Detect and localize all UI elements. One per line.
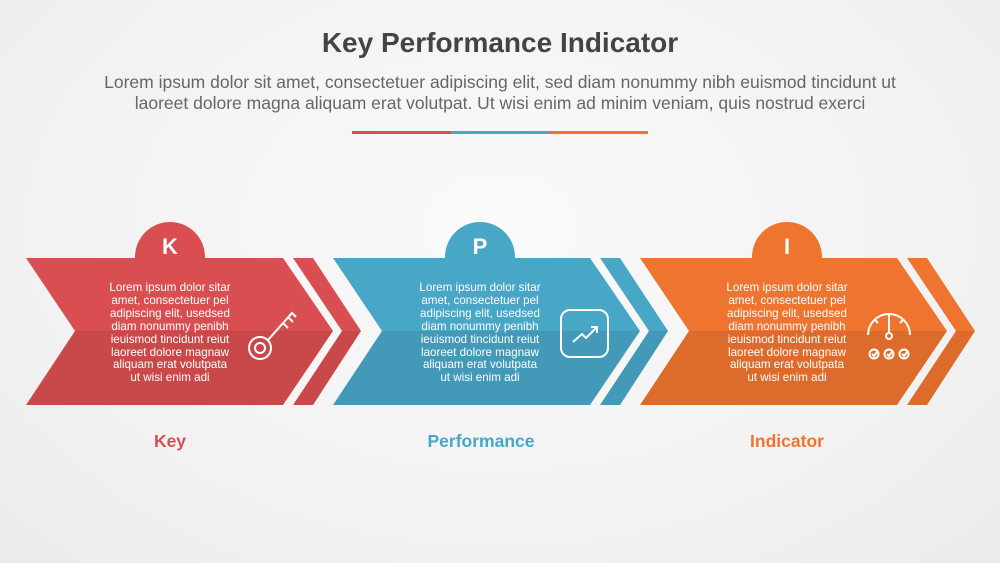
text: P body: laoreet dolore magnaw: [421, 346, 539, 359]
text: P body: ut wisi enim adi: [440, 371, 520, 384]
panel: K: K: [162, 234, 178, 259]
subtitle: Lorem ipsum dolor sit amet, consectetuer adipiscing elit, sed diam nonummy nibh euismod tincidunt ut: [104, 72, 896, 92]
text: K body: ieuismod tincidunt reiut: [111, 333, 229, 346]
icon: key: [249, 313, 296, 359]
icon: growth chart: [561, 310, 608, 357]
text: K body: diam nonummy penibh: [111, 320, 229, 333]
text: I body: ieuismod tincidunt reiut: [728, 333, 846, 346]
text: K body: aliquam erat volutpata: [113, 358, 227, 371]
text: K body: laoreet dolore magnaw: [111, 346, 229, 359]
subtitle: [104, 72, 896, 112]
text: P body: [419, 281, 541, 384]
panel: P: [333, 222, 668, 405]
label: Indicator: Indicator: [750, 431, 824, 451]
text: K body: amet, consectetuer pel: [111, 294, 229, 307]
panel: P: P: [473, 234, 487, 259]
label: Performance: Performance: [428, 431, 534, 451]
text: I body: Lorem ipsum dolor sitar: [726, 281, 848, 294]
text: K body: Lorem ipsum dolor sitar: [109, 281, 231, 294]
text: P body: adipiscing elit, usedsed: [420, 307, 540, 320]
title: Key Performance Indicator: [322, 27, 678, 58]
text: P body: aliquam erat volutpata: [423, 358, 537, 371]
text: P body: amet, consectetuer pel: [421, 294, 539, 307]
subtitle: laoreet dolore magna aliquam erat volutpat. Ut wisi enim ad minim veniam, quis nostrud exerci: [135, 92, 865, 112]
divider tri-color: [352, 131, 648, 134]
text: K body: ut wisi enim adi: [130, 371, 210, 384]
icon: gauge with checks: [868, 314, 910, 358]
text: I body: aliquam erat volutpata: [730, 358, 844, 371]
text: K body: adipiscing elit, usedsed: [110, 307, 230, 320]
text: I body: amet, consectetuer pel: [728, 294, 846, 307]
text: P body: ieuismod tincidunt reiut: [421, 333, 539, 346]
text: I body: [726, 281, 848, 384]
text: I body: adipiscing elit, usedsed: [727, 307, 847, 320]
label: Key: Key: [154, 431, 186, 451]
text: I body: ut wisi enim adi: [747, 371, 827, 384]
panel: K: [26, 222, 361, 405]
text: I body: diam nonummy penibh: [728, 320, 846, 333]
text: K body: [109, 281, 231, 384]
text: P body: diam nonummy penibh: [421, 320, 539, 333]
text: P body: Lorem ipsum dolor sitar: [419, 281, 541, 294]
panel: I: [640, 222, 975, 405]
panel: I: I: [784, 234, 790, 259]
text: I body: laoreet dolore magnaw: [728, 346, 846, 359]
